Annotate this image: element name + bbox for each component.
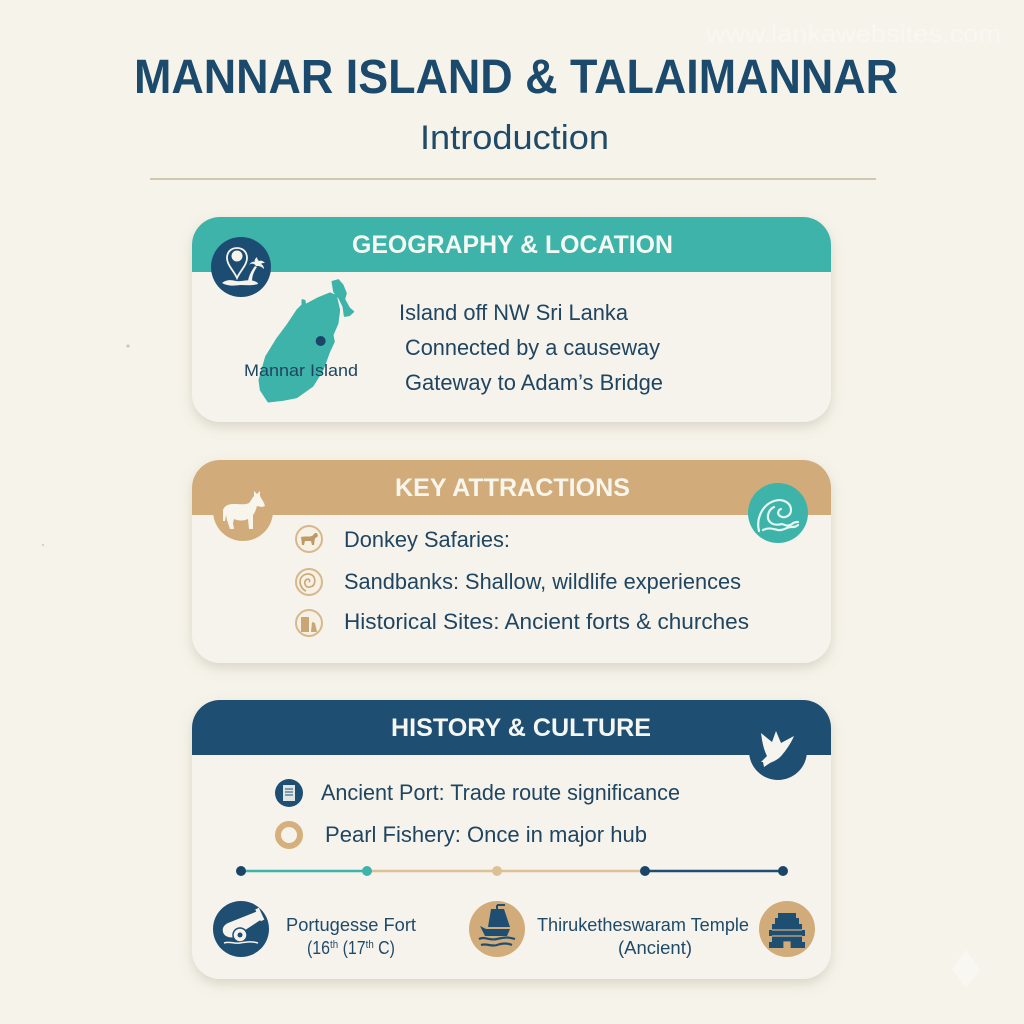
text: Portuguese fort: (17	[338, 938, 366, 958]
map: Mannar Island	[259, 280, 353, 402]
icon: cannon	[213, 901, 269, 957]
text: geography facts	[399, 300, 663, 395]
text: Portuguese fort	[286, 915, 416, 958]
text: Thiruketheswaram temple: (Ancient)	[618, 938, 692, 958]
text: Portuguese fort: C)	[374, 938, 395, 958]
text: Portuguese fort: Portugesse Fort	[286, 915, 416, 935]
text: history list	[321, 780, 680, 847]
heading: geography and location: GEOGRAPHY & LOCATION	[352, 231, 673, 259]
panel header: history	[192, 700, 831, 755]
icon: temple	[759, 901, 815, 957]
text: Thiruketheswaram temple: Thiruketheswaram Temple	[537, 915, 749, 935]
text: Portuguese fort: th	[366, 939, 374, 951]
subtitle: Introduction	[420, 119, 609, 157]
text: attractions list: Donkey Safaries:	[344, 527, 510, 552]
panel: history and culture	[192, 700, 831, 979]
heading: history and culture: HISTORY & CULTURE	[391, 714, 651, 742]
text: geography facts: Gateway to Adam’s Bridge	[405, 370, 663, 395]
list icon: sand spiral	[296, 569, 322, 595]
heading: key attractions: KEY ATTRACTIONS	[395, 474, 630, 502]
list icon: pearl	[278, 824, 300, 846]
list icon: ruins	[296, 610, 322, 636]
icon: donkey	[213, 481, 273, 541]
icon: map pin and palm	[211, 237, 271, 297]
list icon: ancient port	[275, 779, 303, 807]
text: Thiruketheswaram temple	[537, 915, 749, 958]
text: attractions list	[344, 527, 749, 634]
text: history list: Pearl Fishery: Once in major hub	[325, 822, 647, 847]
timeline	[236, 866, 788, 876]
icon: dove	[749, 722, 807, 780]
panel: geography and location	[192, 217, 831, 422]
watermark: www.lankawebsites.com	[705, 21, 1001, 48]
title: MANNAR ISLAND & TALAIMANNAR	[134, 51, 898, 104]
list icon: donkey	[296, 526, 322, 552]
text: geography facts: Connected by a causeway	[405, 335, 660, 360]
icon: wave	[748, 483, 808, 543]
text: Portuguese fort: (16	[307, 938, 333, 958]
text: Portuguese fort: th	[330, 939, 338, 951]
text: attractions list: Sandbanks: Shallow, wildlife experiences	[344, 569, 741, 594]
panel: key attractions	[192, 460, 831, 663]
panel header: attractions	[192, 460, 831, 515]
map label: Mannar Island	[244, 361, 358, 380]
text: geography facts: Island off NW Sri Lanka	[399, 300, 629, 325]
text: history list: Ancient Port: Trade route significance	[321, 780, 680, 805]
panel header: geography	[192, 217, 831, 272]
icon: ship	[469, 901, 525, 957]
sparkle mark	[952, 950, 980, 988]
text: attractions list: Historical Sites: Ancient forts & churches	[344, 609, 749, 634]
